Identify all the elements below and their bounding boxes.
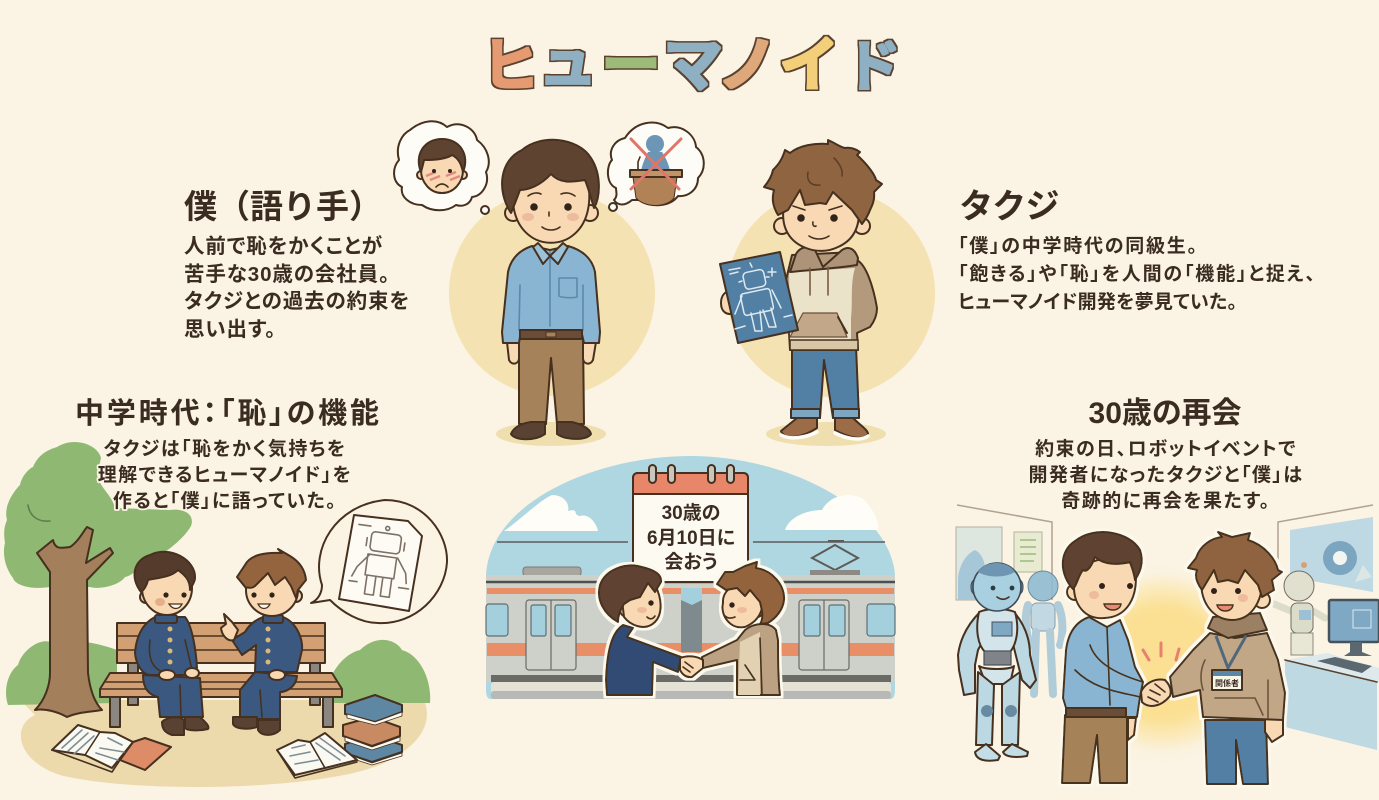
title: ュ — [542, 29, 593, 96]
icon: glow and sparks — [1081, 581, 1245, 745]
panel: takuji description — [958, 188, 1315, 313]
heading: middle school: 中学時代：「恥」の機能 — [75, 397, 379, 430]
heading: takuji: タクジ — [960, 188, 1061, 226]
title: ー — [602, 32, 660, 99]
text block: reunion: 奇跡的に再会を果たす。 — [1061, 490, 1271, 512]
title: ノ — [721, 32, 770, 99]
heading: reunion: 30歳の再会 — [1089, 397, 1241, 430]
panel: reunion at thirty — [956, 397, 1379, 784]
text block: reunion — [1029, 438, 1303, 512]
text block: middle school: 作ると「僕」に語っていた。 — [113, 490, 337, 512]
text block: middle school: タクジは「恥をかく気持ちを — [104, 438, 346, 460]
text block: takuji: 「飽きる」や「恥」を人間の「機能」と捉え、 — [958, 262, 1315, 285]
icon: background robot — [1026, 571, 1062, 694]
scene illustration: robot event — [956, 505, 1379, 784]
figure: narrator character — [449, 140, 655, 446]
text block: middle school: 理解できるヒューマノイド」を — [98, 464, 352, 486]
icon: main robot — [958, 563, 1036, 761]
text block: narrator — [184, 234, 410, 341]
text block: takuji — [958, 234, 1315, 313]
text block: narrator: 思い出す。 — [184, 318, 276, 341]
scene illustration: bench under tree — [4, 442, 447, 787]
figure: grown narrator — [1062, 532, 1143, 783]
icon: calendar: 会おう — [664, 551, 718, 573]
icon: thought bubble, crossed-out podium — [608, 123, 704, 211]
title: マ — [666, 32, 722, 99]
heading: narrator: 僕（語り手） — [184, 188, 382, 225]
figure: takuji character — [720, 140, 935, 446]
icon: monitor — [1317, 600, 1379, 673]
icon: calendar: 6月10日に — [647, 528, 735, 549]
text block: narrator: 苦手な30歳の会社員。 — [184, 263, 390, 286]
icon: thought bubble, blushing face — [394, 121, 489, 214]
icon: handshake — [1141, 680, 1171, 706]
text block: middle school — [98, 438, 352, 512]
panel: narrator description — [184, 188, 410, 341]
title: ド — [849, 35, 898, 98]
title: ヒ — [485, 34, 537, 99]
text block: reunion: 約束の日、ロボットイベントで — [1035, 438, 1297, 460]
figure: grown takuji: 関係者 — [1215, 678, 1239, 688]
text block: narrator: タクジとの過去の約束を — [184, 290, 410, 313]
panel: middle school scene — [4, 397, 447, 787]
icon: calendar — [633, 465, 748, 582]
text block: reunion: 開発者になったタクジと「僕」は — [1029, 464, 1303, 486]
icon: far robot — [1274, 562, 1325, 655]
scene: promise at the train station — [486, 456, 895, 699]
figure: two friends shaking hands — [599, 562, 784, 695]
text block: takuji: 「僕」の中学時代の同級生。 — [958, 234, 1197, 257]
text block: takuji: ヒューマノイド開発を夢見ていた。 — [958, 291, 1237, 313]
figure: grown takuji — [1170, 532, 1285, 784]
icon: calendar: 30歳の — [662, 502, 720, 524]
title: イ — [781, 32, 835, 99]
text block: narrator: 人前で恥をかくことが — [184, 234, 383, 258]
